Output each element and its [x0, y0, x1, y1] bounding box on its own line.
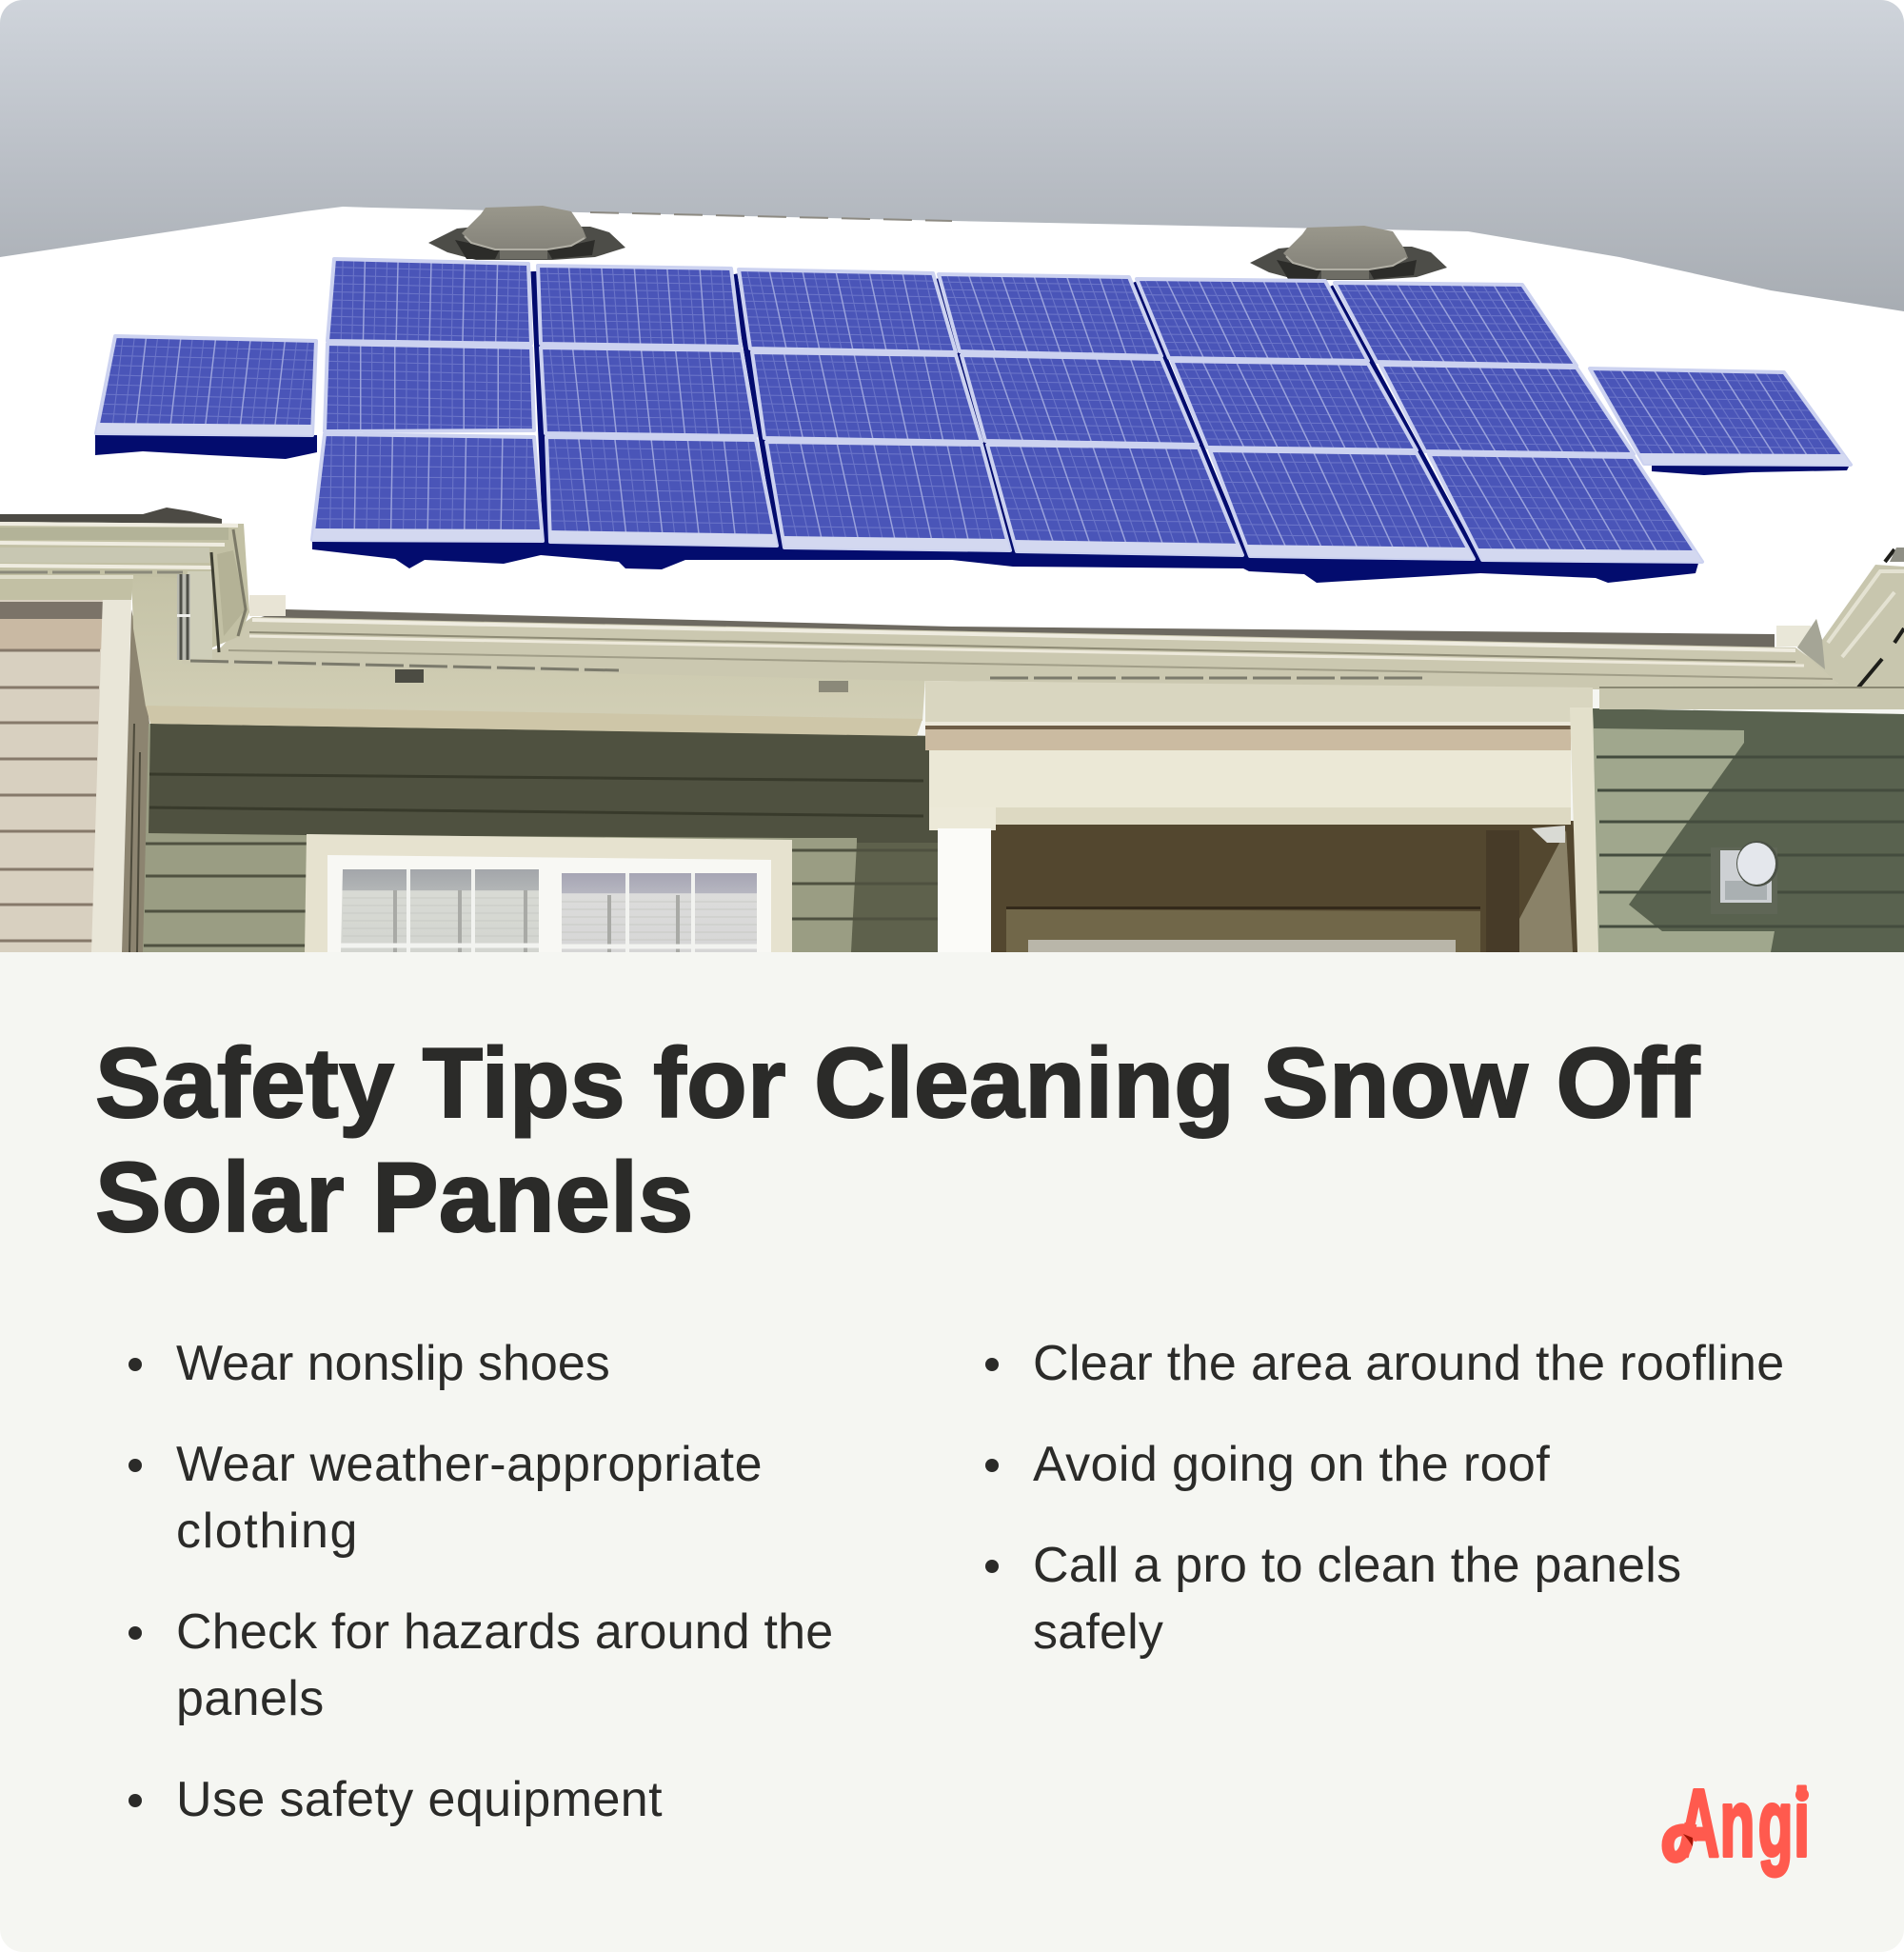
- tips list: left column: clothing: [176, 1504, 359, 1559]
- main gutter: [182, 617, 1838, 689]
- tips list: right column: Clear the area around the roofline: [1033, 1336, 1785, 1391]
- roof ridge shingle edge: [590, 212, 952, 221]
- right gable corner: [1599, 548, 1904, 709]
- title: Solar Panels: [95, 1143, 694, 1253]
- left beige siding wall: [0, 595, 149, 952]
- dark roof edge over left gutter: [0, 508, 222, 524]
- tips list: left column: Use safety equipment: [176, 1772, 663, 1827]
- tips list: right column: Avoid going on the roof: [1033, 1437, 1550, 1492]
- tips list: left column: Wear nonslip shoes: [176, 1336, 610, 1391]
- solar panels: [96, 259, 1851, 563]
- porch post: [938, 828, 991, 952]
- wall lamp: [1711, 841, 1778, 914]
- porch column: [1570, 707, 1598, 952]
- window: [305, 834, 792, 952]
- tips list: right column: [985, 1336, 1785, 1660]
- title: [95, 1028, 1701, 1253]
- roof vent right: [1250, 226, 1447, 280]
- porch roof fascia: [925, 681, 1593, 726]
- porch recess: [990, 821, 1578, 952]
- tips list: left column: panels: [176, 1671, 325, 1726]
- Angi logo: Angi: [1678, 1771, 1810, 1877]
- title: Safety Tips for Cleaning Snow Off: [95, 1028, 1700, 1139]
- snow covered roof: [0, 207, 1904, 686]
- tips list: right column: safely: [1033, 1604, 1163, 1660]
- small snow guard tab: [249, 595, 286, 616]
- tips list: left column: [129, 1336, 833, 1827]
- tips list: left column: Wear weather-appropriate: [176, 1437, 763, 1492]
- dark shingle strip at the eave: [249, 609, 1775, 647]
- main green siding wall: [143, 724, 938, 952]
- panel shadows: [95, 271, 1851, 583]
- tips list: left column: Check for hazards around the: [176, 1604, 833, 1660]
- photo: house roof with snow and solar panels: [0, 0, 1904, 952]
- porch beam: [925, 722, 1571, 830]
- soffit and eave: [131, 576, 925, 736]
- roof vent left: [428, 206, 625, 260]
- white tab at right eave: [1776, 626, 1811, 647]
- tips list: right column: Call a pro to clean the panels: [1033, 1538, 1681, 1593]
- left gutter corner: [0, 522, 249, 660]
- right green siding wall: [1593, 708, 1904, 952]
- sky: [0, 0, 1904, 324]
